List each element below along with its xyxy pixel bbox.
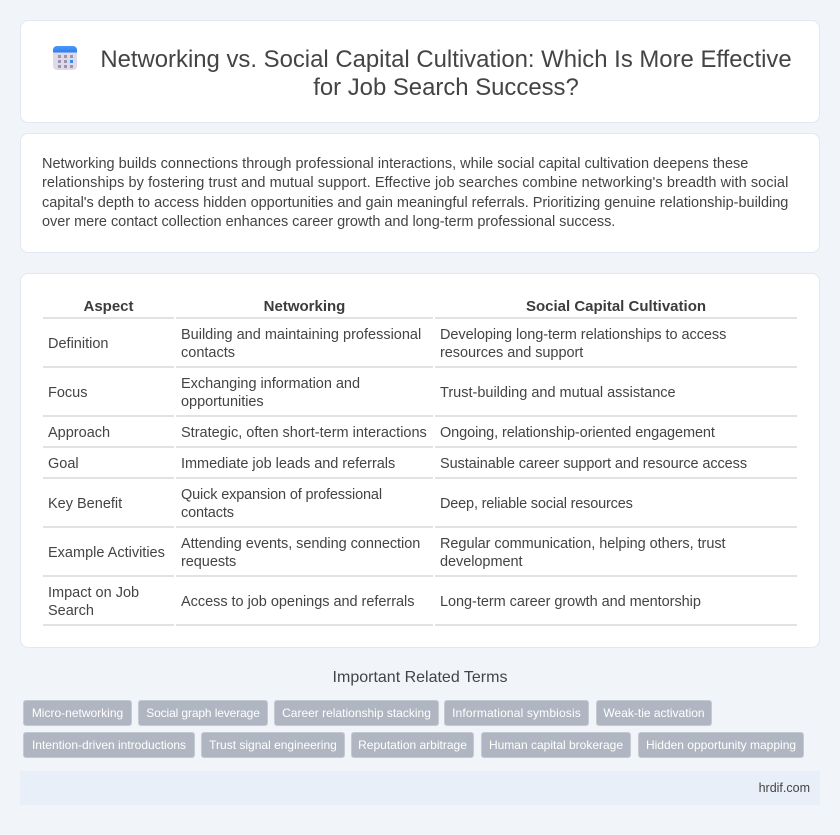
table rows: Immediate job leads and referrals xyxy=(181,456,395,472)
table header row: Social Capital Cultivation xyxy=(526,298,706,315)
table rows: Quick expansion of professional xyxy=(181,487,382,503)
comparison table xyxy=(43,298,797,626)
title xyxy=(100,46,792,101)
footer source: hrdif.com xyxy=(759,781,810,795)
table header row xyxy=(83,298,706,315)
table rows: Attending events, sending connection xyxy=(181,536,420,552)
table rows: Approach xyxy=(48,425,110,441)
icon: calendar xyxy=(53,46,77,70)
table rows: Exchanging information and xyxy=(181,376,360,392)
table rows: Goal xyxy=(48,456,79,472)
table rows: Sustainable career support and resource access xyxy=(440,456,747,472)
related terms tags: Weak-tie activation xyxy=(603,706,705,720)
comparison table panel xyxy=(20,273,820,648)
title: for Job Search Success? xyxy=(313,74,579,101)
related terms tags: Intention-driven introductions xyxy=(32,738,186,752)
related terms tags: Micro-networking xyxy=(32,706,123,720)
intro text: capital's depth to access hidden opportunities and gain meaningful referrals. Prioritizing genuine relationship-building xyxy=(42,195,788,211)
table rows: opportunities xyxy=(181,394,264,410)
related terms tags: Career relationship stacking xyxy=(282,706,431,720)
related terms tags: Informational symbiosis xyxy=(452,706,581,720)
related terms heading: Important Related Terms xyxy=(333,669,507,686)
related terms tags: Hidden opportunity mapping xyxy=(646,738,796,752)
table rows: development xyxy=(440,554,522,570)
table rows: contacts xyxy=(181,505,234,521)
related terms tags xyxy=(23,700,804,758)
table rows: Deep, reliable social resources xyxy=(440,496,633,512)
table rows: resources and support xyxy=(440,345,583,361)
table rows: Focus xyxy=(48,385,88,401)
table rows: Example Activities xyxy=(48,545,165,561)
related terms tags: Human capital brokerage xyxy=(489,738,623,752)
intro text xyxy=(42,156,788,230)
table rows: Regular communication, helping others, trust xyxy=(440,536,726,552)
table rows: Strategic, often short-term interactions xyxy=(181,425,427,441)
intro text: over mere contact collection enhances career growth and long-term professional success. xyxy=(42,214,615,230)
table rows: Building and maintaining professional xyxy=(181,327,421,343)
table rows xyxy=(48,327,747,619)
table rows: Definition xyxy=(48,336,108,352)
table rows: Trust-building and mutual assistance xyxy=(440,385,676,401)
intro panel xyxy=(20,133,820,253)
title: Networking vs. Social Capital Cultivation: Which Is More Effective xyxy=(100,46,792,73)
table rows: requests xyxy=(181,554,236,570)
table rows: Key Benefit xyxy=(48,496,122,512)
table header row: Aspect xyxy=(83,298,134,315)
related terms tags: Social graph leverage xyxy=(146,706,260,720)
footer bar xyxy=(20,771,820,805)
intro text: relationships by fostering trust and mutual support. Effective job searches combine networking's breadth with social xyxy=(42,175,788,191)
table rows: Developing long-term relationships to access xyxy=(440,327,726,343)
intro text: Networking builds connections through professional interactions, while social capital cultivation deepens these xyxy=(42,156,748,172)
header panel xyxy=(20,20,820,123)
table rows: Long-term career growth and mentorship xyxy=(440,594,701,610)
related terms tags: Trust signal engineering xyxy=(209,738,337,752)
table rows: contacts xyxy=(181,345,235,361)
table rows: Impact on Job xyxy=(48,585,139,601)
table header row: Networking xyxy=(264,298,345,315)
table rows: Ongoing, relationship-oriented engagement xyxy=(440,425,715,441)
table rows: Search xyxy=(48,603,94,619)
table rows: Access to job openings and referrals xyxy=(181,594,414,610)
related terms tags: Reputation arbitrage xyxy=(358,738,467,752)
